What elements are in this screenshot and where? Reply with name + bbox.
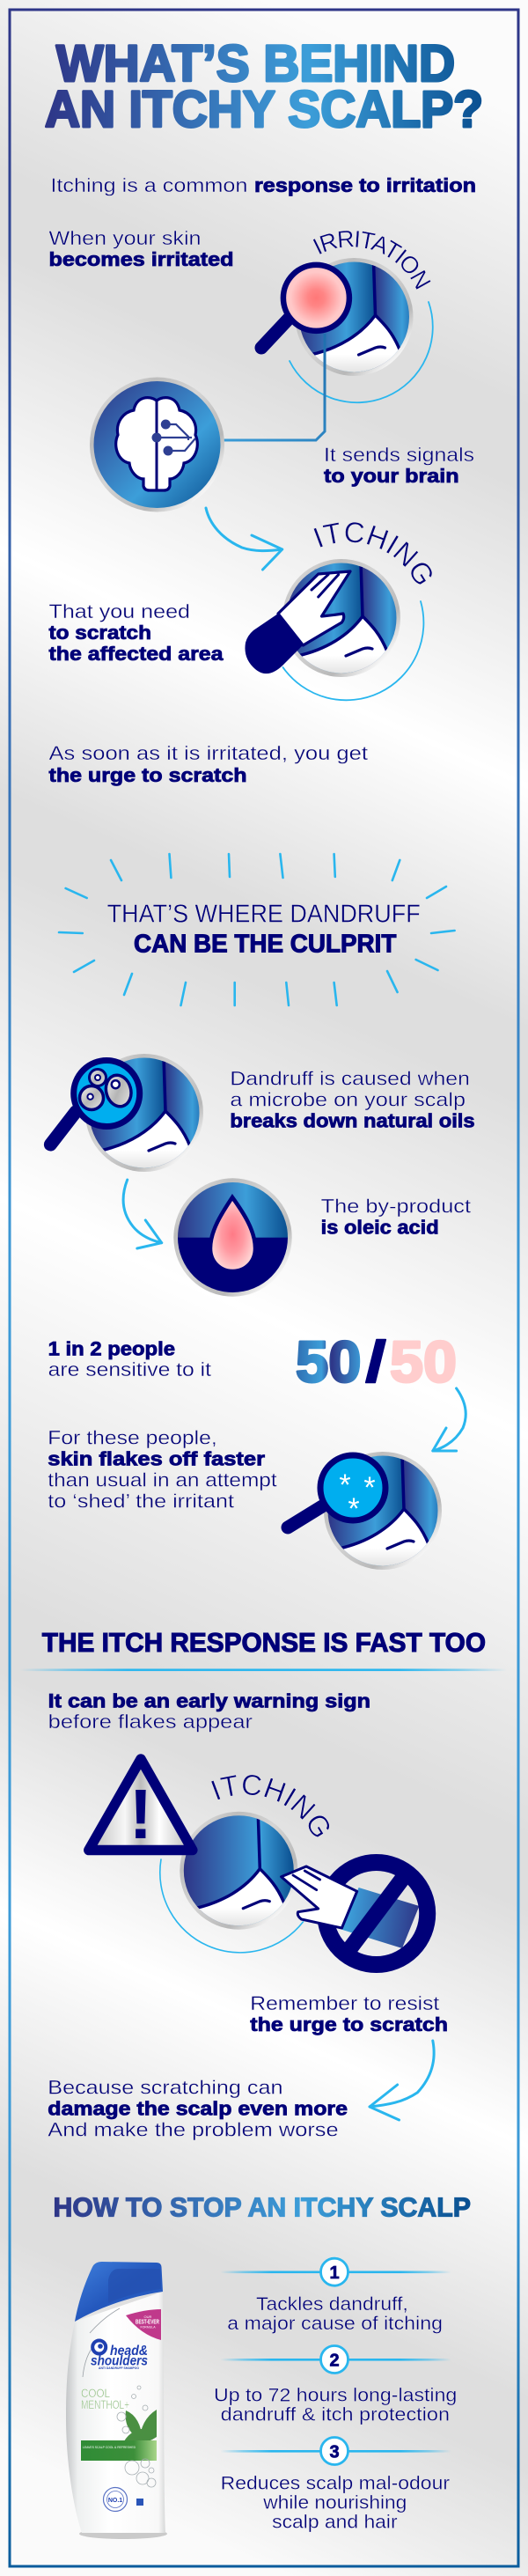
- burst rays around culprit heading: [59, 854, 455, 1005]
- badge: number 2: [320, 2345, 348, 2374]
- heading: dandruff culprit: CAN BE THE CULPRIT: [134, 931, 397, 959]
- benefit 1: Tackles dandruff,: [256, 2294, 408, 2315]
- icon: warning triangle: [89, 1759, 193, 1853]
- icon: head with flakes magnifier: *: [348, 1492, 360, 1526]
- text: damage warning: And make the problem worse: [48, 2118, 339, 2140]
- product: shampoo bottle: [66, 2262, 167, 2539]
- text: need to scratch: [49, 600, 224, 665]
- product: shampoo bottle: ANTI DANDRUFF SHAMPOO: [99, 2366, 140, 2370]
- text: 1 in 2 people: 1 in 2 people: [48, 1337, 175, 1359]
- stat: 50/50: /: [365, 1329, 386, 1395]
- product: shampoo bottle: COOL: [81, 2386, 110, 2400]
- text: early warning: before flakes appear: [48, 1711, 253, 1733]
- text: skin flakes: For these people,: [48, 1427, 217, 1449]
- benefit 3: [221, 2437, 451, 2533]
- text: damage warning: [48, 2076, 348, 2140]
- title: WHAT’S BEHIND: [56, 35, 455, 92]
- product: shampoo bottle: NO.1: [108, 2498, 122, 2504]
- product: shampoo bottle: MENTHOL+: [81, 2397, 129, 2411]
- product: shampoo bottle: LEAVES SCALP COOL & REFRESHED: [83, 2446, 136, 2449]
- text: urge to scratch: [49, 742, 368, 786]
- text: oleic acid: [321, 1196, 471, 1239]
- product: shampoo bottle: FORMULA: [140, 2326, 156, 2329]
- curved label: itching: ITCHING: [313, 522, 432, 585]
- text: early warning: It can be an early warning sign: [48, 1689, 370, 1711]
- stat: 50/50: 50: [296, 1329, 361, 1395]
- heading: dandruff culprit: [107, 901, 421, 959]
- stat: 50/50: 50: [390, 1329, 457, 1395]
- product: shampoo bottle: head&: [110, 2344, 148, 2359]
- icon: irritation head: [290, 258, 417, 380]
- text: resist the urge: [250, 1992, 448, 2035]
- signal line to brain: [211, 334, 325, 440]
- text: urge to scratch: the urge to scratch: [49, 764, 246, 786]
- heading: itch response: THE ITCH RESPONSE IS FAST TOO: [42, 1628, 486, 1658]
- badge: number 3: 3: [329, 2442, 340, 2462]
- title: AN ITCHY SCALP?: [45, 81, 483, 138]
- product: shampoo bottle: shoulders: [91, 2354, 148, 2368]
- benefit 1: [221, 2258, 451, 2334]
- text: urge to scratch: As soon as it is irritated, you get: [49, 742, 368, 764]
- badge: number 3: [320, 2437, 348, 2465]
- arc swoosh: itching warning: [160, 1859, 303, 1953]
- text: skin becomes irritated: [49, 227, 234, 270]
- text: need to scratch: to scratch: [49, 622, 151, 644]
- text: skin becomes irritated: becomes irritated: [49, 248, 234, 270]
- icon: head itching: [175, 1812, 302, 1934]
- text: need to scratch: the affected area: [49, 643, 224, 665]
- text: 1 in 2 people: [48, 1337, 211, 1380]
- text: signals to brain: It sends signals: [324, 444, 474, 466]
- benefit 3: scalp and hair: [272, 2513, 398, 2533]
- text: damage warning: damage the scalp even more: [48, 2097, 348, 2119]
- arc swoosh: itching: [283, 601, 423, 700]
- text: oleic acid: is oleic acid: [321, 1217, 439, 1239]
- icon: head with microbe magnifier: [50, 1054, 208, 1176]
- badge: number 2: 2: [329, 2351, 340, 2370]
- benefit 2: [214, 2345, 457, 2425]
- text: signals to brain: [324, 444, 474, 487]
- icon: scratching hand: [245, 571, 350, 673]
- text: 1 in 2 people: are sensitive to it: [48, 1358, 211, 1380]
- title: [45, 35, 483, 138]
- icon: head with flakes magnifier: [288, 1452, 446, 1574]
- icon: magnifier over red spot: [261, 265, 349, 348]
- text: damage warning: Because scratching can: [48, 2076, 283, 2098]
- text: dandruff cause: breaks down natural oils: [230, 1110, 475, 1132]
- heading: dandruff culprit: THAT’S WHERE DANDRUFF: [107, 901, 421, 929]
- benefit 3: Reduces scalp mal-odour: [221, 2473, 450, 2493]
- curved label: irritation: IRRITATION: [313, 231, 431, 290]
- badge: number 1: [320, 2258, 348, 2285]
- product: shampoo bottle: BEST-EVER: [136, 2319, 159, 2326]
- intro text: [50, 174, 476, 196]
- arrow: 50/50 to flakes: [433, 1388, 466, 1451]
- icon: warning triangle: !: [129, 1775, 152, 1853]
- text: oleic acid: The by-product: [321, 1196, 471, 1218]
- arc swoosh: irritation: [290, 302, 433, 402]
- arrow: brain to itching: [206, 508, 282, 570]
- icon: brain: [90, 377, 224, 512]
- icon: head with flakes magnifier: *: [363, 1471, 376, 1505]
- text: dandruff cause: a microbe on your scalp: [230, 1089, 466, 1111]
- icon: itching head: [278, 559, 405, 681]
- icon: no scratching sign: [282, 1863, 428, 1965]
- text: early warning: [48, 1689, 370, 1733]
- stat: 50/50: [296, 1329, 457, 1395]
- text: skin flakes: skin flakes off faster: [48, 1448, 266, 1470]
- arrow: to oleic acid: [123, 1180, 162, 1248]
- text: signals to brain: to your brain: [324, 465, 459, 487]
- badge: number 1: 1: [329, 2263, 340, 2283]
- icon: head with flakes magnifier: *: [339, 1468, 351, 1502]
- benefit 3: while nourishing: [262, 2492, 407, 2513]
- benefit 2: dandruff & itch protection: [221, 2404, 450, 2425]
- benefit 2: Up to 72 hours long-lasting: [214, 2385, 457, 2405]
- intro text: response to irritation: [254, 174, 476, 196]
- text: skin becomes irritated: When your skin: [49, 227, 202, 249]
- text: dandruff cause: Dandruff is caused when: [230, 1067, 470, 1089]
- text: skin flakes: [48, 1427, 277, 1512]
- text: need to scratch: That you need: [49, 600, 190, 622]
- text: resist the urge: the urge to scratch: [250, 2013, 448, 2035]
- text: dandruff cause: [230, 1067, 475, 1132]
- text: skin flakes: than usual in an attempt: [48, 1469, 277, 1491]
- text: resist the urge: Remember to resist: [250, 1992, 439, 2014]
- icon: oleic acid drop: [173, 1178, 292, 1297]
- product: shampoo bottle: OUR: [144, 2315, 152, 2319]
- arrow: resist to damage: [370, 2041, 434, 2120]
- intro text: Itching is a common: [50, 174, 247, 196]
- heading: how to stop: HOW TO STOP AN ITCHY SCALP: [53, 2191, 471, 2222]
- text: skin flakes: to ‘shed’ the irritant: [48, 1490, 234, 1512]
- curved label: itching: ITCHING: [211, 1775, 329, 1836]
- benefit 1: a major cause of itching: [227, 2314, 443, 2334]
